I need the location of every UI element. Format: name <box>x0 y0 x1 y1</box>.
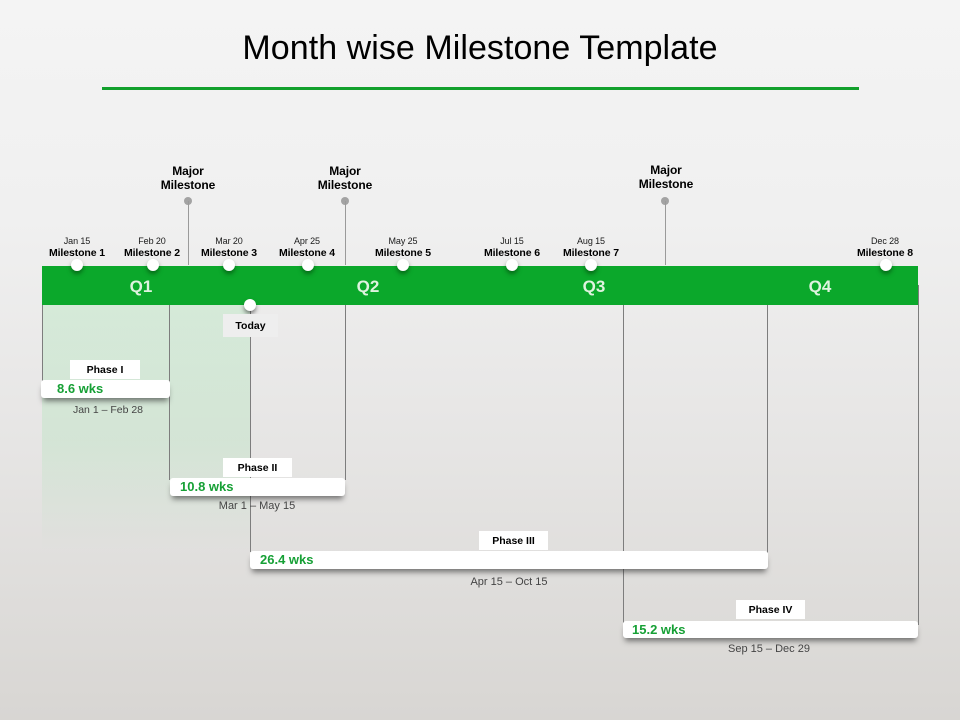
milestone 8 label <box>857 236 913 259</box>
milestone 3 label: Mar 20 <box>215 236 243 246</box>
major milestone 1 <box>161 164 215 265</box>
milestone 1 label: Milestone 1 <box>49 247 105 259</box>
major milestone 3: Milestone <box>639 177 693 191</box>
milestone dot 1 <box>71 259 83 271</box>
milestone 2 label: Milestone 2 <box>124 247 180 259</box>
milestone 8 label: Dec 28 <box>871 236 899 246</box>
phase 1 bar: 8.6 wks <box>57 381 103 396</box>
milestone 7 label <box>563 236 619 259</box>
milestone dot 6 <box>506 259 518 271</box>
phase 4 dates: Sep 15 – Dec 29 <box>728 643 810 655</box>
milestone 5 label: Milestone 5 <box>375 247 431 259</box>
milestone 4 label <box>279 236 336 259</box>
milestone 6 label: Milestone 6 <box>484 247 540 259</box>
milestone 8 label: Milestone 8 <box>857 247 913 259</box>
shaded elapsed area <box>42 305 250 550</box>
phase 2 dates: Mar 1 – May 15 <box>219 500 295 512</box>
today marker <box>244 299 256 311</box>
today label: Today <box>235 320 266 332</box>
phase 1 dates: Jan 1 – Feb 28 <box>73 404 143 416</box>
quarter label Q1: Q1 <box>130 277 152 296</box>
milestone dot 3 <box>223 259 235 271</box>
milestone 4 label: Apr 25 <box>294 236 320 246</box>
milestone 3 label: Milestone 3 <box>201 247 257 259</box>
today label <box>223 314 278 337</box>
phase 4 label <box>736 600 805 619</box>
quarter label Q2: Q2 <box>357 277 379 296</box>
phase 3 label <box>479 531 548 550</box>
phase 1 bar <box>41 380 170 398</box>
milestone 2 label <box>124 236 180 259</box>
phase 3 bar <box>250 551 768 569</box>
major milestone 3 <box>639 163 693 265</box>
milestone 7 label: Milestone 7 <box>563 247 619 259</box>
quarter label Q3: Q3 <box>583 277 605 296</box>
phase 3 bar: 26.4 wks <box>260 552 314 567</box>
phase 3 label: Phase III <box>492 535 535 547</box>
phase 1 label: Phase I <box>87 364 123 376</box>
milestone dot 2 <box>147 259 159 271</box>
milestone 5 label <box>375 236 431 259</box>
phase 4 bar: 15.2 wks <box>632 622 686 637</box>
milestone 1 label <box>49 236 105 259</box>
milestone dot 8 <box>880 259 892 271</box>
title underline <box>102 87 859 90</box>
milestone dot 4 <box>302 259 314 271</box>
phase 2 bar <box>170 478 345 496</box>
major milestone 1: Milestone <box>161 178 215 192</box>
milestone 7 label: Aug 15 <box>577 236 605 246</box>
milestone dot 7 <box>585 259 597 271</box>
major milestone 2: Major <box>329 164 361 178</box>
phase 4 bar <box>623 621 918 638</box>
milestone dot 5 <box>397 259 409 271</box>
major milestone 1: Major <box>172 164 204 178</box>
milestone 2 label: Feb 20 <box>138 236 166 246</box>
major milestone 2 <box>318 164 372 265</box>
phase 1 label <box>70 360 140 379</box>
milestone 5 label: May 25 <box>389 236 417 246</box>
phase 3 dates: Apr 15 – Oct 15 <box>470 576 548 588</box>
quarter band <box>42 266 918 305</box>
milestone 6 label <box>484 236 540 259</box>
milestone 6 label: Jul 15 <box>500 236 524 246</box>
major milestone 2: Milestone <box>318 178 372 192</box>
milestone 4 label: Milestone 4 <box>279 247 335 259</box>
quarter label Q4: Q4 <box>809 277 831 296</box>
major milestone 3: Major <box>650 163 682 177</box>
milestone 1 label: Jan 15 <box>64 236 90 246</box>
phase 2 label <box>223 458 292 477</box>
phase 2 label: Phase II <box>238 462 277 474</box>
phase 4 label: Phase IV <box>749 604 792 616</box>
phase 2 bar: 10.8 wks <box>180 479 234 494</box>
milestone 3 label <box>201 236 257 259</box>
title: Month wise Milestone Template <box>242 29 718 67</box>
